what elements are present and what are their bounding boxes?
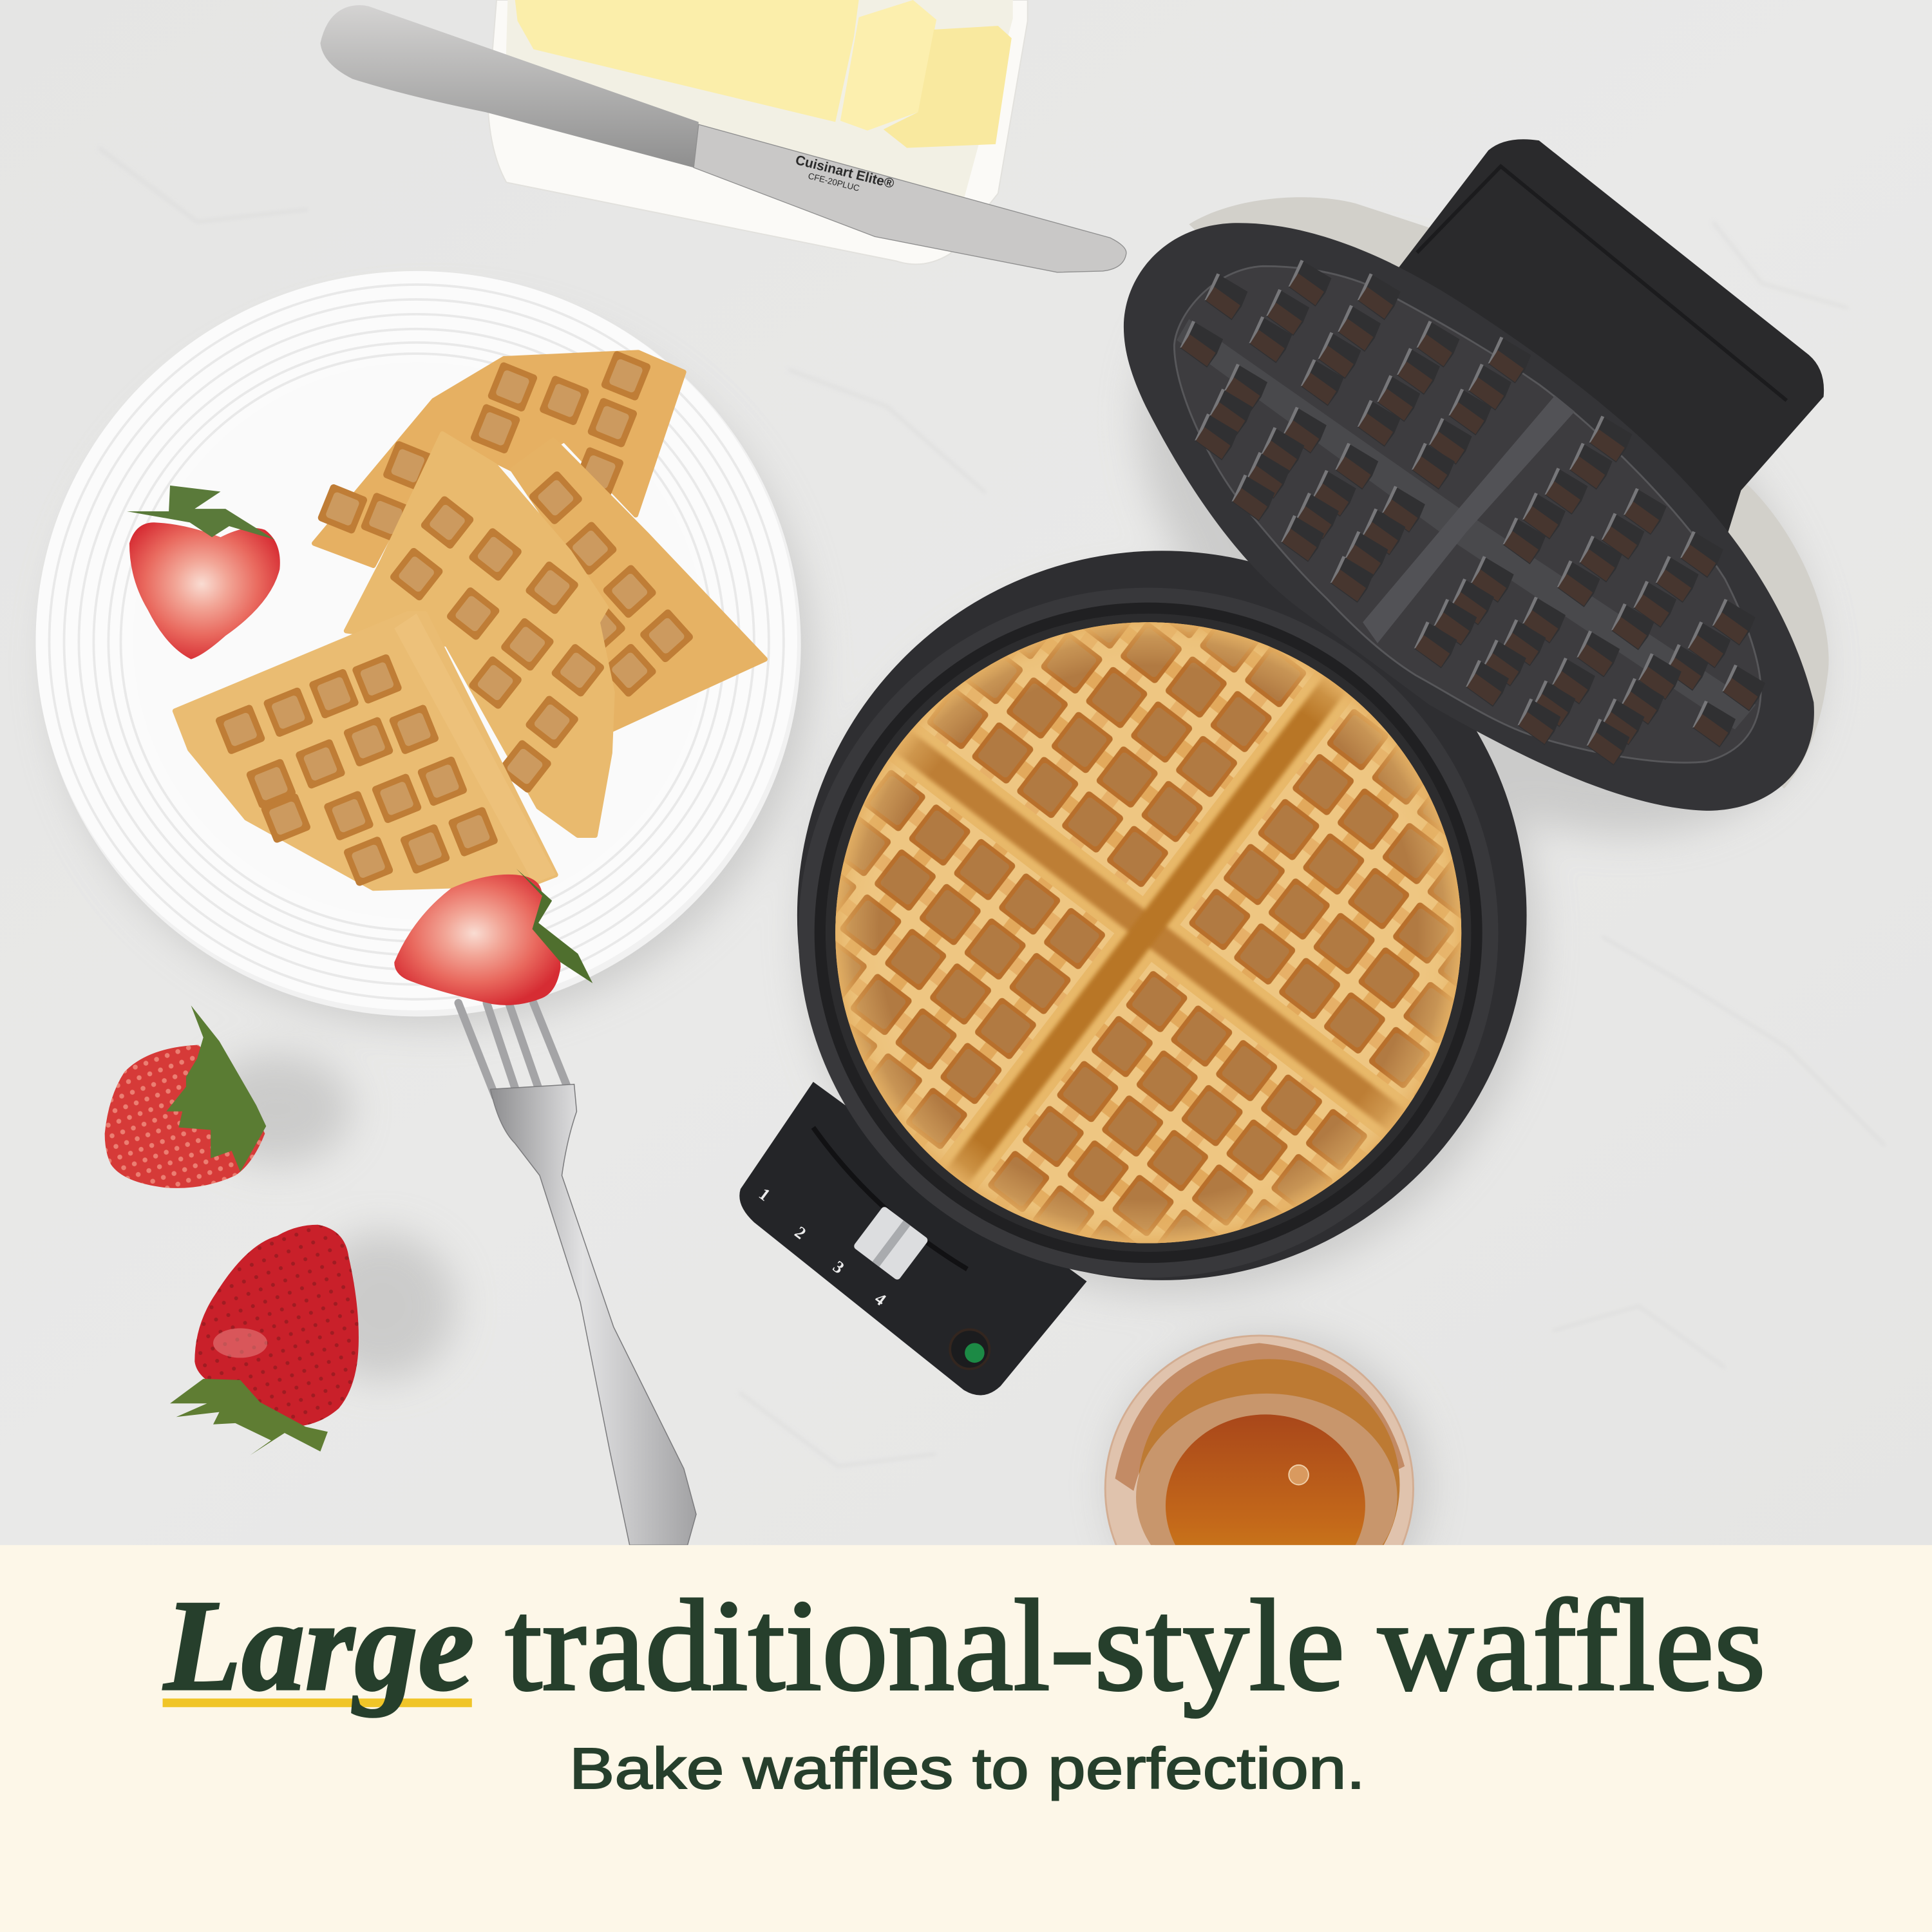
dial slot <box>813 1128 967 1269</box>
waffle wedge: right <box>513 440 765 730</box>
knife handle <box>320 5 699 167</box>
knife <box>320 5 1126 272</box>
heat settings: 3 <box>829 1256 848 1278</box>
knife blade <box>694 124 1126 272</box>
indicator light <box>950 1329 989 1369</box>
lid rim <box>1124 223 1814 811</box>
strawberry leaves <box>516 869 592 983</box>
strawberry leaves <box>170 1379 328 1455</box>
waffle wedge: middle <box>346 433 612 835</box>
waffle wedge: top <box>314 350 684 565</box>
photo scene objects <box>36 0 1829 1546</box>
fork tines <box>459 1003 569 1097</box>
syrup jar <box>1105 1336 1414 1641</box>
ridge blocks <box>1180 260 1765 766</box>
headline: traditional-style waffles <box>505 1573 1766 1718</box>
heat settings: 2 <box>791 1222 810 1243</box>
dial knob <box>853 1206 929 1281</box>
bubble <box>1289 1465 1309 1484</box>
strawberry: whole, middle <box>105 1005 266 1188</box>
plate channels <box>1177 319 1756 730</box>
fork head and handle <box>490 1084 696 1545</box>
fork <box>459 1003 696 1545</box>
waffle iron lid <box>1124 139 1829 811</box>
strawberry: whole, bottom <box>170 1225 359 1455</box>
lid handle <box>1396 139 1824 542</box>
heat settings <box>755 1184 890 1309</box>
butter dish <box>488 0 1028 264</box>
knife brand: CFE-20PLUC <box>807 171 861 193</box>
strawberry: cut, on fork <box>394 869 592 1005</box>
knife brand: Cuisinart Elite® <box>794 153 896 191</box>
waffle wedge: bottom <box>175 614 556 888</box>
butter pat <box>884 26 1012 148</box>
dish <box>488 0 1028 264</box>
waffle grid <box>681 462 1614 1396</box>
headline underline <box>163 1698 472 1707</box>
strawberry leaves <box>166 1005 266 1172</box>
lid plate <box>1174 266 1761 762</box>
butter slice <box>840 0 936 131</box>
strawberry leaves <box>127 486 275 540</box>
headline: Large <box>163 1573 475 1718</box>
waffle iron lower base <box>797 551 1527 1280</box>
syrup <box>1166 1414 1365 1597</box>
heat settings: 1 <box>755 1184 774 1205</box>
stainless lid back <box>1189 197 1829 788</box>
subheading: Bake waffles to perfection. <box>569 1737 1365 1801</box>
waffle iron control panel <box>739 1082 1087 1395</box>
butter block <box>515 0 859 122</box>
heat settings: 4 <box>871 1289 890 1309</box>
dinner plate <box>35 271 801 1016</box>
marble veining <box>99 148 1885 1466</box>
contact shadows <box>48 375 1828 1545</box>
caption panel <box>0 1545 1932 1932</box>
photo scene background: marble counter <box>0 0 1932 1545</box>
strawberry: cut, on plate <box>127 486 280 659</box>
baked round waffle <box>681 462 1614 1396</box>
